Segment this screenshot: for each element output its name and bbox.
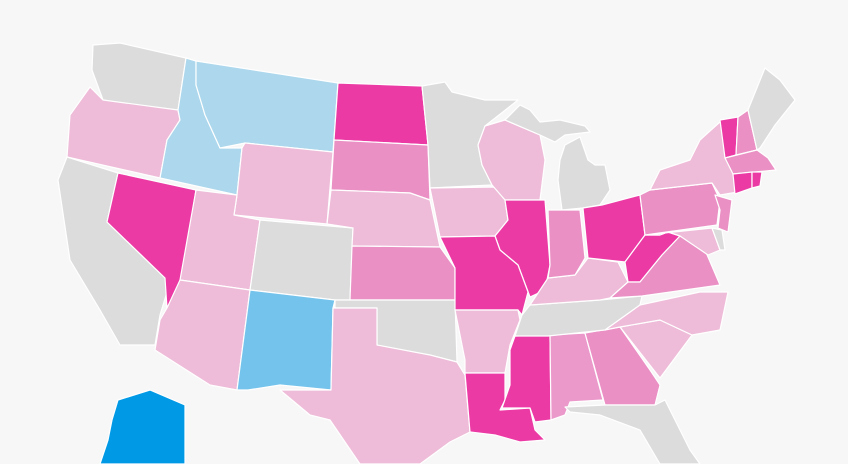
state: West Virginia <box>625 232 680 282</box>
state: Ohio <box>583 195 645 262</box>
state: Delaware <box>712 228 725 250</box>
state: Georgia <box>585 327 660 405</box>
state: Texas <box>280 308 470 464</box>
state: Oregon <box>67 87 180 178</box>
state: Vermont <box>720 117 738 158</box>
state: Alaska <box>100 390 185 464</box>
state: Colorado <box>250 220 353 300</box>
state: Utah <box>180 190 260 290</box>
state: Michigan lower <box>558 137 610 210</box>
state: North Dakota <box>334 83 428 145</box>
state: Idaho <box>160 58 242 195</box>
state: Pennsylvania <box>640 183 720 235</box>
state: Kansas <box>350 246 455 300</box>
state: New Hampshire <box>736 110 757 155</box>
state: Oklahoma <box>335 300 457 362</box>
state: Mississippi <box>502 335 551 422</box>
state: Wisconsin <box>478 120 545 200</box>
state: Kentucky <box>530 258 628 305</box>
state: North Carolina <box>605 292 728 335</box>
state: Rhode Island <box>752 172 762 188</box>
state: South Carolina <box>620 320 692 378</box>
state: Virginia <box>610 236 720 298</box>
state: Minnesota <box>422 82 518 188</box>
state: Arizona <box>155 280 250 390</box>
state: Florida <box>565 400 700 464</box>
state: New York <box>650 122 738 195</box>
state: New Mexico <box>237 290 335 390</box>
state: Iowa <box>430 187 508 237</box>
state: Missouri <box>440 236 528 315</box>
state: South Dakota <box>331 140 430 200</box>
state: Michigan upper <box>505 105 590 142</box>
state: Montana <box>196 61 338 152</box>
state: Connecticut <box>733 172 752 194</box>
state: Nebraska <box>327 190 440 247</box>
state: California <box>58 157 167 345</box>
state: Nevada <box>107 173 196 308</box>
state: Alabama <box>550 333 603 420</box>
state: Maine <box>748 68 795 150</box>
state: New Jersey <box>715 195 732 232</box>
state: Maryland <box>645 228 720 255</box>
state: Illinois <box>495 200 550 297</box>
state: Arkansas <box>455 310 520 373</box>
state: Washington <box>92 43 186 110</box>
state: Massachusetts <box>725 150 776 174</box>
state: Tennessee <box>515 296 642 336</box>
state: Louisiana <box>465 373 545 442</box>
state: Wyoming <box>234 143 333 224</box>
state: Indiana <box>548 210 585 278</box>
